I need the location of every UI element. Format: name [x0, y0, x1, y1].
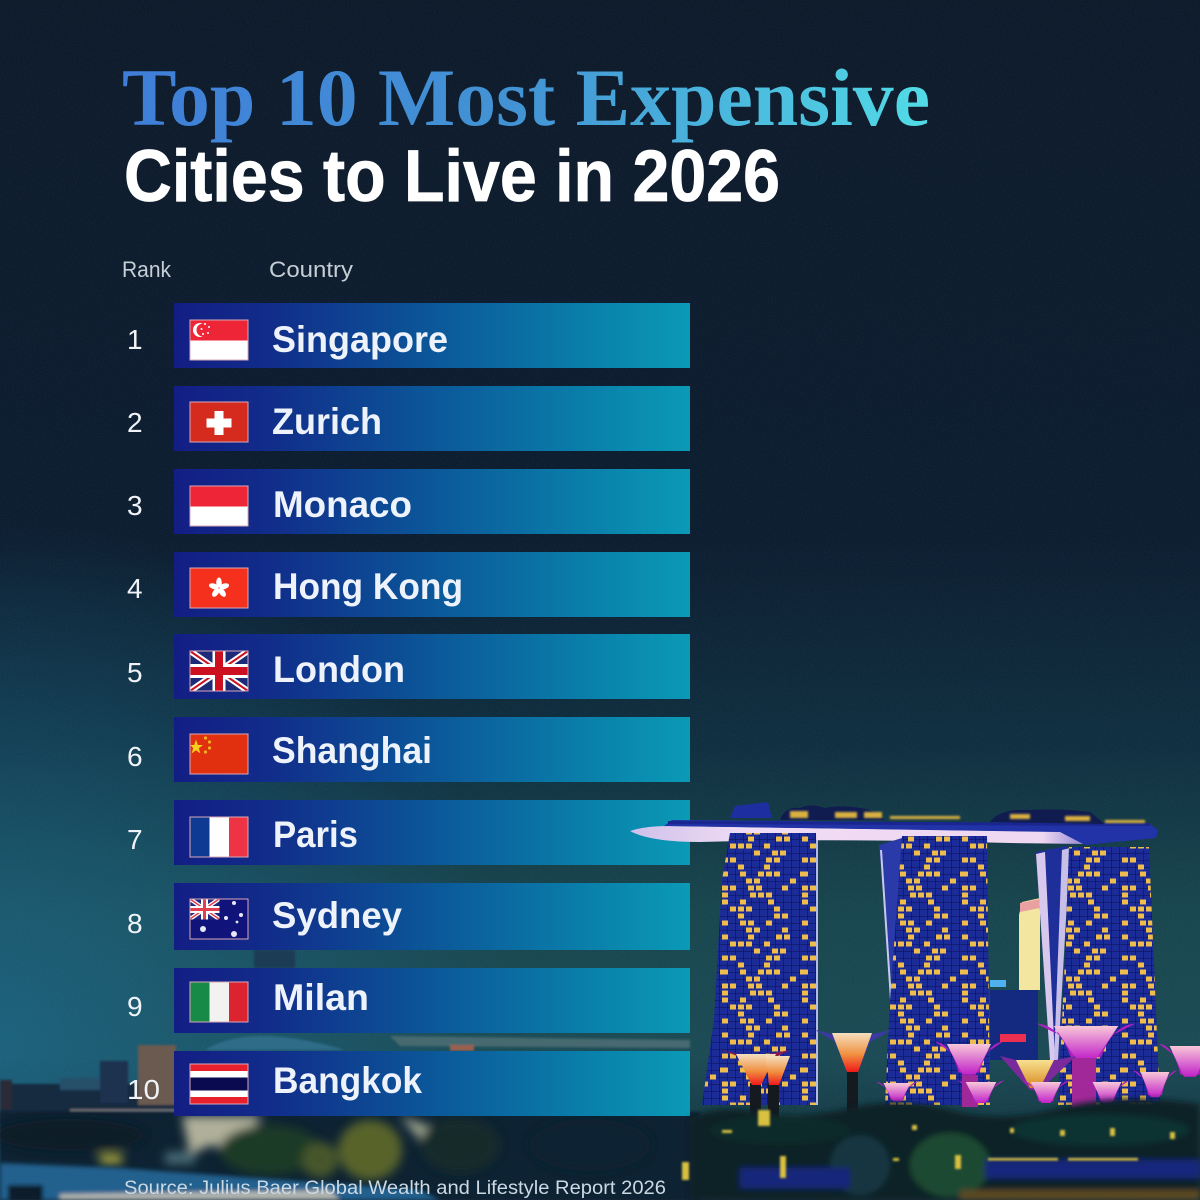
row 7: 7	[127, 824, 143, 855]
row 7: Paris	[273, 814, 358, 855]
row 10: 10	[127, 1074, 160, 1105]
icon: China flag	[190, 734, 248, 774]
icon: Monaco flag	[190, 486, 248, 526]
icon: Italy flag	[190, 982, 248, 1022]
row 3: 3	[127, 490, 143, 521]
row 5	[127, 634, 690, 699]
row 8: 8	[127, 908, 143, 939]
icon: Swiss flag	[190, 402, 248, 442]
row 3: Monaco	[273, 484, 412, 525]
supertrees	[722, 1024, 1200, 1123]
icon: Hong Kong flag	[190, 568, 248, 608]
icon: Australia flag	[190, 899, 248, 939]
title line 2: Cities to Live in 2026	[124, 136, 780, 217]
icon: France flag	[190, 817, 248, 857]
row 3	[127, 469, 690, 534]
row 2: 2	[127, 407, 143, 438]
row 8: Sydney	[272, 895, 402, 936]
icon: Thailand flag	[190, 1064, 248, 1104]
row 4: Hong Kong	[273, 566, 463, 607]
title	[122, 52, 930, 217]
row 10	[127, 1051, 690, 1116]
icon: Singapore flag	[190, 320, 248, 360]
row 2	[127, 386, 690, 451]
row 8	[127, 883, 690, 950]
title line 1: Top 10 Most Expensive	[122, 52, 930, 143]
row 9: 9	[127, 991, 143, 1022]
column headers: Rank	[122, 257, 172, 282]
row 4	[127, 552, 690, 617]
column headers: Country	[269, 257, 353, 282]
row 5: 5	[127, 657, 143, 688]
row 1: 1	[127, 324, 143, 355]
row 6: Shanghai	[272, 730, 432, 771]
source: Source: Julius Baer Global Wealth and Lifestyle Report 2026	[124, 1178, 666, 1199]
photo: left city skyline and gardens	[0, 950, 700, 1200]
skypark deck	[630, 802, 1158, 845]
row 6: 6	[127, 741, 143, 772]
icon: UK flag	[190, 651, 248, 691]
row 7	[127, 800, 690, 865]
tower 3	[1036, 846, 1160, 1105]
photo: Marina Bay Sands	[630, 802, 1200, 1200]
row 6	[127, 717, 690, 782]
row 4: 4	[127, 573, 143, 604]
row 2: Zurich	[272, 401, 382, 442]
row 9: Milan	[273, 977, 369, 1018]
column headers	[122, 257, 353, 282]
tower 2	[879, 836, 990, 1105]
row 1: Singapore	[272, 319, 448, 360]
row 1	[127, 303, 690, 368]
row 5: London	[273, 649, 405, 690]
rooftop gardens	[730, 802, 1145, 824]
row 10: Bangkok	[273, 1060, 422, 1101]
gardens foreground	[682, 1099, 1200, 1200]
row 9	[127, 968, 690, 1033]
tower 1	[702, 833, 818, 1105]
background skyscraper	[990, 898, 1040, 1060]
